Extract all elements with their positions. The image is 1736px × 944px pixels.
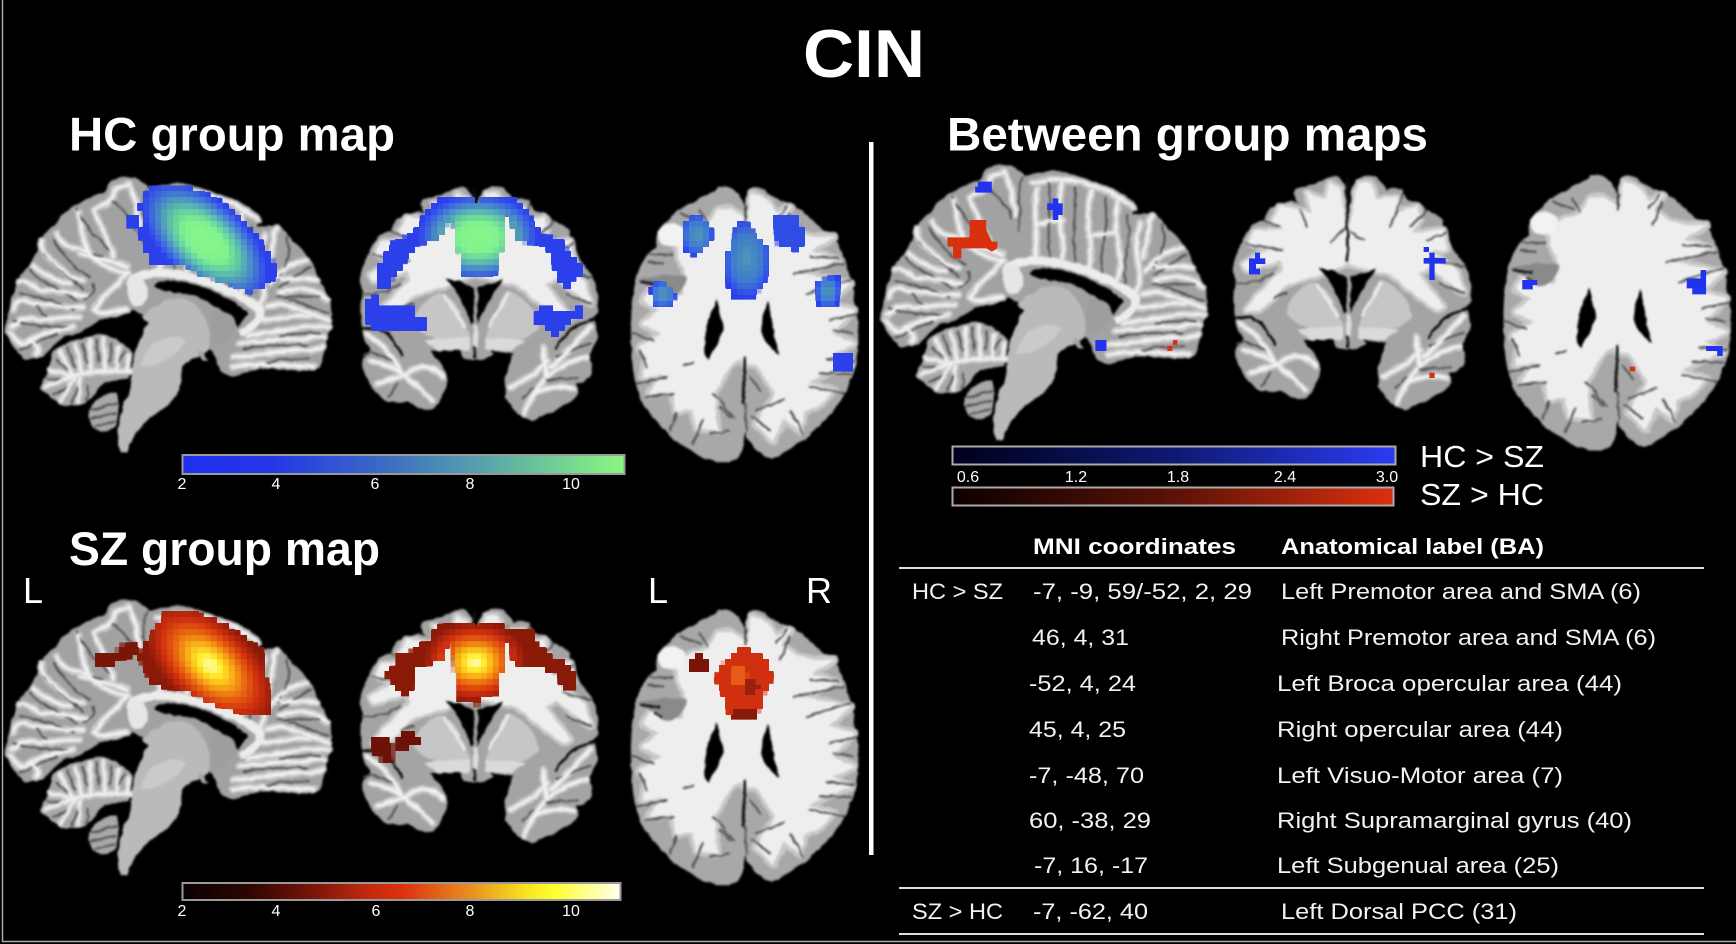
- table row group labels: SZ > HC: [912, 899, 1003, 924]
- table coordinates column: 45, 4, 25: [1029, 717, 1126, 742]
- colorbar scale labels: 1.8: [1167, 469, 1189, 486]
- brain: between axial: [1504, 175, 1731, 451]
- divider line: [869, 142, 874, 855]
- brain: SZ sagittal: [5, 582, 331, 876]
- table coordinates column: 60, -38, 29: [1029, 808, 1151, 833]
- colorbar: HC scale: 6: [371, 476, 380, 493]
- brain: HC sagittal: [5, 162, 331, 453]
- table anatomical labels column: Left Visuo-Motor area (7): [1277, 763, 1563, 788]
- table row group labels: [912, 579, 1003, 924]
- title: CIN: [803, 16, 925, 92]
- panel: Between group maps brains: [880, 164, 1731, 451]
- table anatomical labels column: [1277, 579, 1656, 924]
- table anatomical labels column: Right Supramarginal gyrus (40): [1277, 808, 1632, 833]
- colorbar: SZ scale: 6: [372, 903, 381, 920]
- legend label: HC > SZ: HC > SZ: [1420, 439, 1544, 474]
- table anatomical labels column: Left Premotor area and SMA (6): [1281, 579, 1641, 604]
- colorbar: HC scale: 10: [562, 476, 580, 493]
- table row group labels: HC > SZ: [912, 579, 1003, 604]
- brain: HC coronal: [360, 187, 599, 421]
- brain: between sagittal: [880, 164, 1207, 441]
- colorbar: SZ > HC: [952, 488, 1394, 506]
- table coordinates column: -7, -9, 59/-52, 2, 29: [1033, 579, 1252, 604]
- panel: SZ group map brains: [5, 582, 858, 885]
- orientation label: L sagittal: L: [23, 570, 43, 611]
- colorbar: HC scale: [178, 455, 624, 493]
- table anatomical labels column: Left Broca opercular area (44): [1277, 671, 1622, 696]
- table coordinates column: -52, 4, 24: [1029, 671, 1136, 696]
- table header: MNI coordinates: [1033, 534, 1236, 559]
- brain: between coronal: [1233, 176, 1472, 410]
- table coordinates column: -7, 16, -17: [1034, 853, 1148, 878]
- colorbar: HC scale: 4: [272, 476, 281, 493]
- heading: SZ group map: SZ group map: [69, 522, 380, 575]
- colorbar: SZ scale: 10: [562, 903, 580, 920]
- brain: SZ axial: [631, 609, 858, 885]
- colorbar scale labels: 1.2: [1065, 469, 1087, 486]
- table header: Anatomical label (BA): [1281, 534, 1544, 559]
- orientation label: L axial: L: [648, 570, 668, 611]
- colorbar: HC scale: 8: [466, 476, 475, 493]
- colorbar: HC scale: 2: [178, 476, 187, 493]
- table anatomical labels column: Left Subgenual area (25): [1277, 853, 1559, 878]
- table anatomical labels column: Right Premotor area and SMA (6): [1281, 625, 1656, 650]
- colorbar scale labels: 2.4: [1274, 469, 1296, 486]
- heading: HC group map: HC group map: [69, 108, 395, 160]
- colorbar scale labels: 3.0: [1376, 469, 1398, 486]
- table: MNI coordinates and anatomical labels: [899, 534, 1704, 935]
- colorbar: SZ scale: 8: [466, 903, 475, 920]
- colorbar: HC > SZ: [952, 446, 1396, 464]
- colorbar: SZ scale: 4: [272, 903, 281, 920]
- table coordinates column: [1029, 579, 1252, 924]
- orientation label: R axial: R: [806, 570, 832, 611]
- brain: SZ coronal: [360, 609, 599, 843]
- legend label: SZ > HC: SZ > HC: [1420, 477, 1544, 512]
- colorbar scale labels: 0.6: [957, 469, 979, 486]
- table coordinates column: 46, 4, 31: [1032, 625, 1129, 650]
- brain: HC axial: [631, 186, 858, 462]
- heading: Between group maps: Between group maps: [947, 108, 1428, 160]
- panel: HC group map brains: [5, 162, 858, 462]
- table header: [1033, 534, 1544, 559]
- table anatomical labels column: Right opercular area (44): [1277, 717, 1563, 742]
- table coordinates column: -7, -48, 70: [1029, 763, 1144, 788]
- table coordinates column: -7, -62, 40: [1033, 899, 1148, 924]
- colorbar: SZ scale: [178, 883, 620, 920]
- table anatomical labels column: Left Dorsal PCC (31): [1281, 899, 1517, 924]
- colorbar scale labels: [957, 469, 1398, 486]
- colorbar: SZ scale: 2: [178, 903, 187, 920]
